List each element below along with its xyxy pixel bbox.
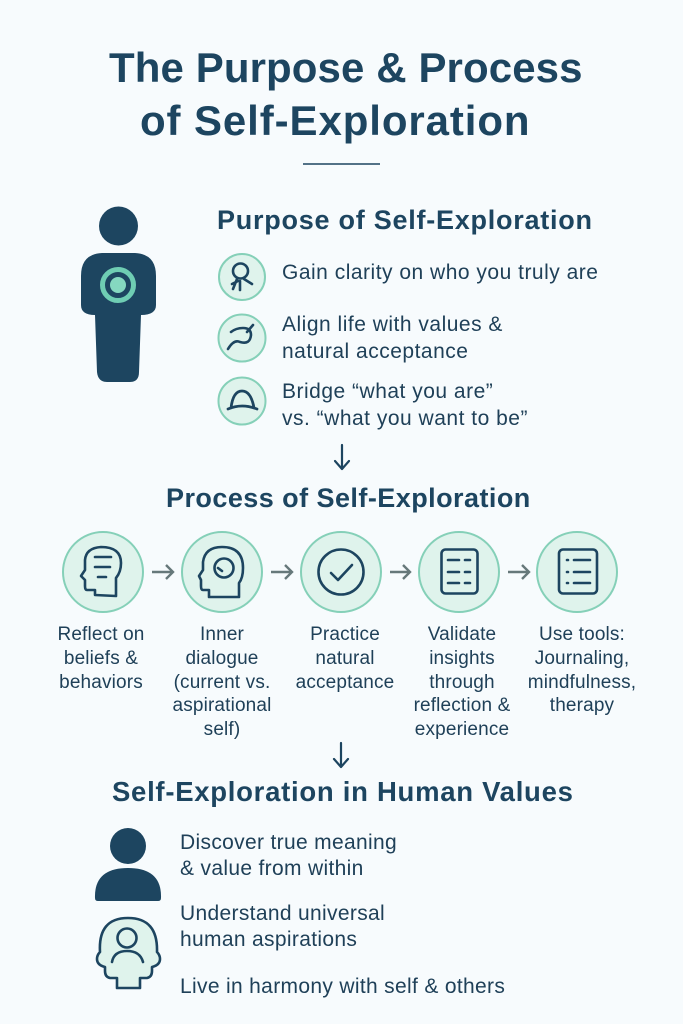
arrow 3 <box>390 565 410 579</box>
icon: user <box>95 828 161 901</box>
icon: badge <box>219 254 265 300</box>
step circle 1 <box>63 532 143 612</box>
text: step 4 <box>414 624 510 740</box>
text: values item 1: & value from within <box>180 857 364 880</box>
text: purpose item 2: natural acceptance <box>282 340 468 362</box>
text: step 3: Practice <box>310 624 380 645</box>
text: step 3: acceptance <box>296 672 394 693</box>
text: step 4: experience <box>415 719 509 740</box>
text: step 1: Reflect on <box>57 624 145 645</box>
text: step 2 <box>172 624 271 740</box>
text: values item 1 <box>180 831 397 880</box>
text: step 4: through <box>429 672 495 693</box>
text: step 2: dialogue <box>185 648 259 669</box>
icon: curve <box>218 314 266 362</box>
title: The Purpose & Process <box>109 44 583 91</box>
text: purpose item 2: Align life with values & <box>282 313 503 336</box>
text: step 5: mindfulness, <box>528 672 636 693</box>
icon: head with person <box>97 918 160 988</box>
text: step 2: Inner <box>200 624 244 645</box>
text: values item 2 <box>180 902 385 951</box>
text: purpose item 2 <box>282 313 503 362</box>
step circle 5 <box>537 532 617 612</box>
text: values item 3: Live in harmony with self & others <box>180 975 505 998</box>
text: purpose item 1: Gain clarity on who you truly are <box>282 261 598 284</box>
text: step 2: aspirational <box>172 695 271 716</box>
text: purpose item 3 <box>282 380 528 430</box>
arrow 2 <box>271 565 292 579</box>
text: step 1: beliefs & <box>64 648 138 669</box>
text: values item 2: human aspirations <box>180 928 357 951</box>
icon: person with target <box>81 206 156 382</box>
text: purpose item 3: Bridge “what you are” <box>282 380 493 403</box>
text: step 5: Journaling, <box>535 648 629 669</box>
heading: process: Process of Self-Exploration <box>166 483 531 513</box>
title: of Self-Exploration <box>140 97 530 144</box>
text: step 2: self) <box>204 719 240 740</box>
text: step 4: Validate <box>428 624 496 645</box>
text: values item 2: Understand universal <box>180 902 385 925</box>
step circle 2 <box>182 532 262 612</box>
arrow 4 <box>508 565 529 579</box>
arrow: to values <box>334 743 348 767</box>
title <box>109 44 583 144</box>
text: step 4: insights <box>429 648 495 669</box>
heading: purpose: Purpose of Self-Exploration <box>217 205 593 235</box>
heading: values: Self-Exploration in Human Values <box>112 776 574 807</box>
text: step 5 <box>528 624 636 716</box>
text: step 3: natural <box>315 648 375 669</box>
text: purpose item 3: vs. “what you want to be” <box>282 406 528 430</box>
text: step 5: Use tools: <box>539 624 625 645</box>
text: step 5: therapy <box>550 695 614 716</box>
text: step 1: behaviors <box>59 672 143 693</box>
text: values item 1: Discover true meaning <box>180 831 397 854</box>
text: step 4: reflection & <box>414 695 510 716</box>
arrow 1 <box>152 565 173 579</box>
step circle 4 <box>419 532 499 612</box>
icon: arch <box>218 378 266 424</box>
text: step 3 <box>296 624 394 693</box>
step circle 3 <box>301 532 381 612</box>
text: step 2: (current vs. <box>174 672 270 693</box>
arrow: to process <box>335 445 349 469</box>
text: step 1 <box>57 624 145 693</box>
